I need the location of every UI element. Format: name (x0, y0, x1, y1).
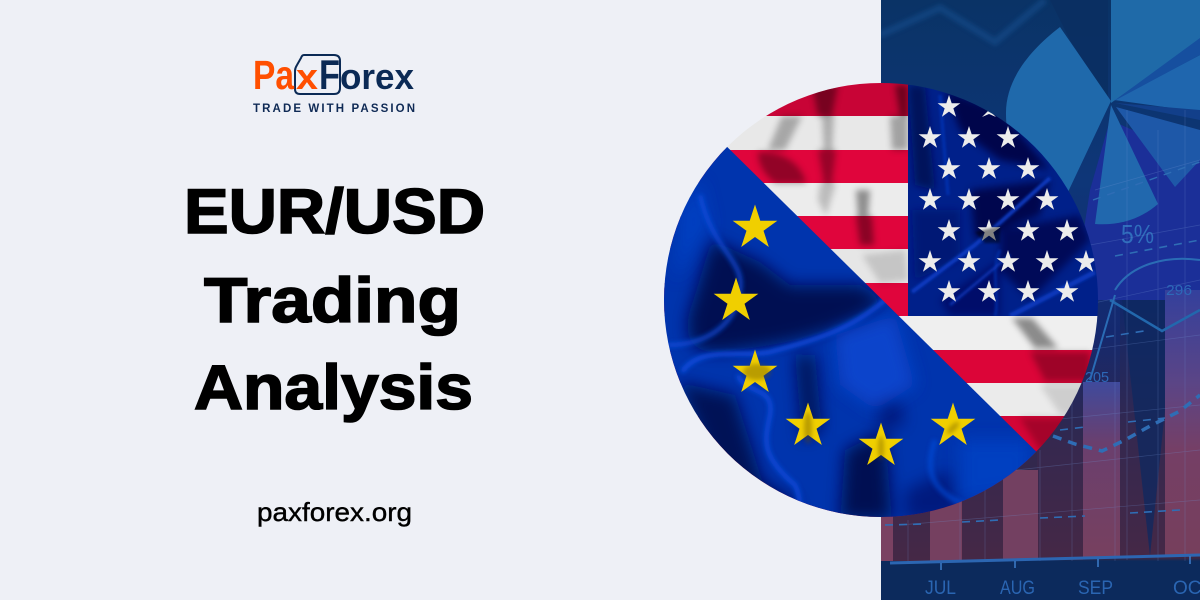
stripe folds (758, 85, 1090, 450)
logo wordmark: x (296, 56, 318, 97)
EU flag folds (668, 180, 1030, 520)
axis month labels: AUG (1000, 578, 1035, 599)
title: EUR/USD Trading Analysis (184, 177, 485, 423)
label: value 296: 296 (1166, 282, 1192, 299)
USA canton (908, 80, 1108, 316)
axis month labels: JUL (925, 578, 956, 599)
star fold shading (743, 364, 961, 460)
line chart curves (1090, 259, 1200, 380)
star shading (975, 226, 1000, 243)
website address: paxforex.org (257, 497, 412, 527)
title: EUR/USD Trading Analysis: EUR/USD (184, 177, 485, 247)
canton folds (908, 85, 1090, 316)
chart x axis (881, 555, 1200, 600)
title: EUR/USD Trading Analysis: Trading (204, 266, 461, 336)
logo wordmark: orex (340, 56, 414, 97)
axis month labels (925, 580, 1200, 594)
bar chart columns (881, 290, 1200, 562)
canton highlights (912, 95, 1095, 316)
white stars (919, 95, 1097, 302)
flag circle: USA and EU (664, 83, 1098, 517)
dark spike shapes (1126, 329, 1165, 554)
title: EUR/USD Trading Analysis: Analysis (194, 353, 473, 423)
USA stripes (660, 80, 1100, 520)
logo tagline: TRADE WITH PASSION (253, 103, 415, 115)
label: 5 percent: 5% (1121, 219, 1154, 249)
logo: PaxForex (253, 51, 415, 115)
yellow EU stars (714, 204, 975, 465)
label: value 205: 205 (1085, 369, 1109, 386)
grid lines (907, 110, 1200, 561)
axis month labels: SEP (1078, 578, 1113, 599)
pie chart wedges (1006, 0, 1200, 224)
dashed trend lines (885, 162, 1200, 525)
logo wordmark (253, 51, 414, 98)
logo wordmark: F (319, 51, 340, 98)
dark background bars (893, 300, 1165, 561)
logo wordmark: Pa (253, 52, 295, 98)
panel: financial chart backdrop (880, 0, 1200, 600)
EU flag triangle (664, 84, 1082, 517)
logo frame (295, 55, 340, 94)
